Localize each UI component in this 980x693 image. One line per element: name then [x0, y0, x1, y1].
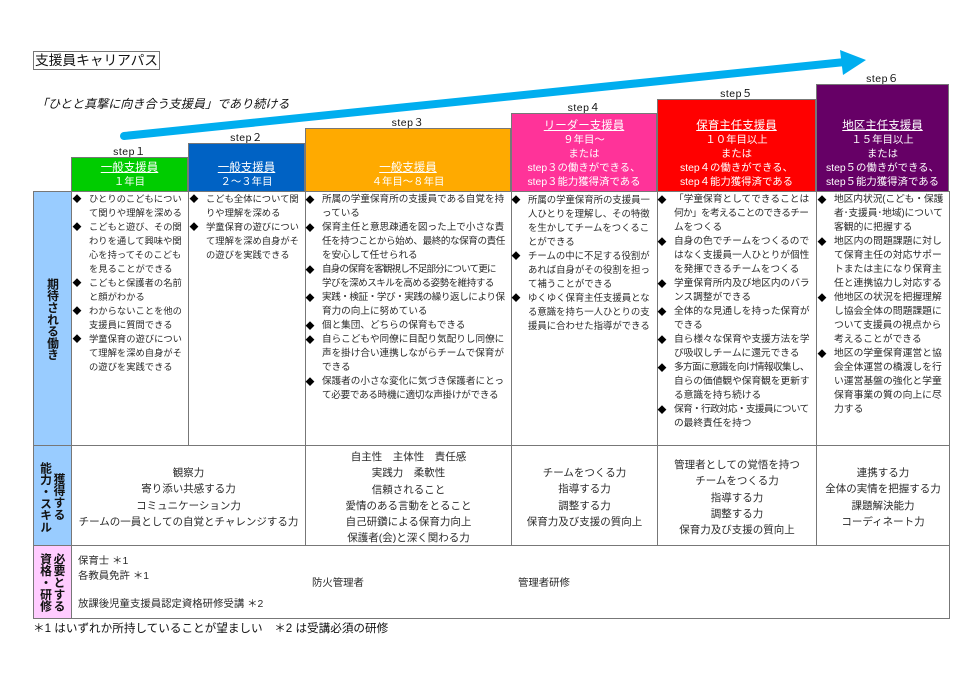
expected work: step 3: 任を持つことから始め、最終的な保育の責任 — [322, 236, 505, 247]
text: ◆ — [511, 195, 520, 205]
text: ◆ — [657, 279, 666, 289]
row label: expected work: 期待される働き — [46, 278, 60, 361]
cell border 5 — [657, 191, 817, 446]
cell border 3 — [305, 191, 512, 446]
expected work: step 2: りや理解を深める — [206, 208, 280, 218]
step 6 header: step５の働きができる、 — [826, 163, 939, 174]
expected work: step 1: を見ることができる — [89, 264, 172, 274]
skills cell: step 5: 指導する力 — [711, 492, 763, 504]
expected work: step 4: チームの中に不足する役割が — [528, 250, 650, 261]
row label: qualifications: 資格・研修 — [38, 552, 52, 612]
expected work: step 6: 地区内状況(こども・保護 — [834, 194, 943, 205]
step 3 header: 一般支援員 — [379, 162, 437, 174]
expected work: step 5: 自身の色でチームをつくるので — [674, 236, 809, 247]
row label: qualifications — [33, 545, 72, 619]
expected work: step 1: て関りや理解を深める — [89, 208, 182, 218]
step 4 header: リーダー支援員 — [544, 120, 624, 132]
step 2 label: step２ — [230, 132, 263, 144]
step 6 header: step５能力獲得済である — [826, 177, 939, 188]
expected work: step 6: 客観的に把握する — [834, 222, 912, 233]
step 2 header — [188, 143, 305, 191]
skills cell: step 4: 調整する力 — [558, 500, 611, 512]
expected work: step 3: て必要である時機に適切な声掛けができる — [322, 390, 498, 401]
step 1 header: １年目 — [114, 177, 145, 188]
skills cell: step 6: 連携する力 — [857, 467, 909, 479]
expected work: step 3 — [305, 194, 505, 401]
qualification: fire manager: 防火管理者 — [312, 578, 364, 589]
row label: qualifications: 必要とする — [52, 552, 66, 612]
expected work: step 6: 地区内の問題課題に対し — [834, 236, 942, 247]
expected work: step 3: 実践・検証・学び・実践の繰り返しにより保 — [322, 292, 505, 303]
expected work: step 2: の遊びを実践できる — [206, 250, 290, 260]
expected work: step 1: の遊びを実践できる — [89, 362, 172, 372]
expected work: step 3: 個と集団、どちらの保育もできる — [322, 320, 465, 331]
step 5 header: １０年目以上 — [705, 135, 768, 146]
expected work: step 6: 考えることができる — [834, 334, 922, 345]
skills cell: step 4 — [511, 445, 658, 546]
expected work: step 3: 所属の学童保育所の支援員である自覚を持 — [322, 194, 504, 205]
step 5 header: step４能力獲得済である — [680, 177, 793, 188]
skills cell: step 3: 実践力 柔軟性 — [372, 467, 445, 479]
expected work: step 5: び吸収しチームに還元できる — [674, 348, 799, 359]
expected work: step 6: ついて支援員の視点から — [834, 320, 941, 331]
expected work: step 4: る意識を持ち一人ひとりの支 — [528, 306, 650, 317]
qualification: teaching license: 各教員免許 ＊1 — [78, 571, 149, 582]
expected work: step 4: 所属の学童保育所の支援員一 — [528, 194, 650, 205]
expected work: step 5: 何か」を考えることのできるチー — [674, 208, 808, 219]
text: ◆ — [72, 306, 82, 316]
expected work: step 4: ゆくゆく保育主任支援員とな — [528, 292, 650, 303]
expected work: step 6: 任と連携協力し対応する — [834, 278, 942, 289]
expected work: step 2: 学童保育の遊びについ — [206, 222, 299, 232]
step 4 header: または — [568, 149, 600, 160]
expected work: step 6: 他地区の状況を把握理解 — [834, 292, 942, 303]
text: ◆ — [72, 194, 82, 204]
skills cell: step 3: 自主性 主体性 責任感 — [351, 451, 466, 463]
skills cell: step 6: 課題解決能力 — [852, 500, 914, 512]
expected work: step 1: わからないことを他の — [89, 306, 182, 316]
expected work: step 5: ンス調整ができる — [674, 292, 751, 303]
skills cell: step 5: チームをつくる力 — [695, 475, 779, 487]
expected work: step 6: 会全体運営の橋渡しを行 — [834, 362, 942, 373]
expected work: step 1: て理解を深め自身がそ — [89, 348, 182, 358]
expected work: step 3: を安心して任せられる — [322, 250, 418, 261]
step 1 header — [71, 157, 188, 191]
step 2 header: 一般支援員 — [218, 162, 275, 174]
expected work: step 4: 人ひとりを理解し、その特徴 — [528, 208, 650, 219]
expected work: step 3: 保護者の小さな変化に気づき保護者にとっ — [322, 376, 504, 387]
step 4 header: step３の働きができる、 — [528, 163, 640, 174]
expected work: step 1: こどもと遊び、その関 — [89, 222, 182, 232]
expected work: step 5: 自らの価値観や保育観を更新す — [674, 376, 810, 387]
skills cell: step 3: 保護者(会)と深く関わる力 — [347, 532, 470, 544]
step 3 header — [305, 128, 511, 191]
text: ◆ — [305, 195, 314, 205]
expected work: step 6: 保育事業の質の向上に尽 — [834, 390, 942, 401]
step 4 header: ９年目～ — [563, 135, 605, 146]
expected work: step 4: て補うことができる — [528, 278, 612, 289]
expected work cells — [71, 191, 189, 446]
expected work: step 5: 自ら様々な保育や支援方法を学 — [674, 334, 810, 345]
skills cell: step 4: 保育力及び支援の質向上 — [527, 516, 642, 528]
text: ◆ — [657, 237, 666, 247]
skills cell: step 6 — [816, 445, 950, 546]
expected work: step 1: と顔がわかる — [89, 292, 145, 302]
text: ◆ — [657, 335, 666, 345]
expected work: step 3: 自らこどもや同僚に目配り気配りし同僚に — [322, 334, 504, 345]
row label: expected work — [33, 191, 72, 446]
step 6 header — [816, 84, 949, 191]
skills cell: step 5 — [657, 445, 817, 546]
expected work: step 2: こども全体について関 — [206, 194, 299, 204]
skills cell: step 3: 信頼されること — [372, 484, 445, 496]
expected work: step 3: 声を掛け合い連携しながらチームで保育が — [322, 348, 504, 359]
expected work: step 5: はなく支援員一人ひとりが個性 — [674, 250, 809, 261]
expected work: step 1 — [72, 194, 182, 372]
skills cell: steps 1-2: チームの一員としての自覚とチャレンジする力 — [79, 516, 298, 528]
expected work: step 1: こどもと保護者の名前 — [89, 278, 182, 288]
tagline: 「ひとと真撃に向き合う支援員」であり続ける — [36, 97, 290, 111]
step 4 header — [511, 113, 657, 191]
step 3 header: ４年目～８年目 — [372, 177, 444, 188]
footnote: ＊1 はいずれか所持していることが望ましい ＊2 は受講必須の研修 — [33, 622, 388, 635]
text: ◆ — [305, 377, 314, 387]
skills cell: step 5: 管理者としての覚悟を持つ — [674, 459, 800, 471]
expected work: step 5: 学童保育所内及び地区内のバラ — [674, 278, 810, 289]
expected work: step 5: ムをつくる — [674, 222, 722, 233]
expected work: step 5: る意識を持ち続ける — [674, 390, 761, 401]
text: ◆ — [305, 321, 314, 331]
skills cell: step 4: チームをつくる力 — [543, 467, 626, 479]
row label: skills: 能力・スキル — [38, 462, 52, 533]
expected work: step 4: とができる — [528, 236, 575, 247]
cell border 4 — [511, 191, 658, 446]
qualification: childcare worker: 保育士 ＊1 — [78, 556, 128, 567]
step 5 header: または — [721, 149, 752, 160]
expected work: step 3: 保育主任と意思疎通を図った上で小さな責 — [322, 222, 504, 233]
text: ◆ — [305, 223, 314, 233]
expected work: step 1: 心を持ってそのこども — [89, 250, 181, 260]
skills cell: step 3 — [305, 445, 512, 546]
skills cell: steps 1-2: コミュニケーション力 — [136, 500, 241, 512]
expected work: step 5 — [657, 194, 810, 429]
skills cell: steps 1-2: 寄り添い共感する力 — [141, 483, 236, 495]
expected work: step 5: の最終責任を持つ — [674, 418, 752, 429]
expected work: step 5: 保育・行政対応・支援員について — [674, 404, 809, 415]
expected work: step 6: 者･支援員･地域)について — [834, 208, 943, 219]
step 3 label: step３ — [392, 117, 424, 129]
skills cell: step 6: コーディネート力 — [841, 516, 925, 528]
skills cell: step 6: 全体の実情を把握する力 — [825, 483, 941, 495]
skills cell: steps 1-2: 観察力 — [173, 467, 204, 479]
skills cell: step 3: 愛情のある言動をとること — [346, 500, 472, 512]
expected work: step 6: し協会全体の問題課題に — [834, 306, 942, 317]
step 6 header: １５年目以上 — [851, 135, 914, 146]
expected work: step 1: わりを通して興味や関 — [89, 236, 182, 246]
expected work: step 5: できる — [674, 320, 703, 331]
text: ◆ — [305, 335, 314, 345]
text: ◆ — [817, 293, 826, 303]
text: ◆ — [72, 278, 82, 288]
expected work: step 4: 援員に合わせた指導ができる — [528, 320, 650, 331]
expected work: step 6 — [817, 194, 943, 415]
expected work: step 3: 学びを深めスキルを高める姿勢を維持する — [322, 278, 494, 289]
step 5 header: step４の働きができる、 — [680, 163, 793, 174]
skills cell: step 5: 調整する力 — [711, 508, 763, 520]
text: ◆ — [305, 293, 314, 303]
step 6 header: 地区主任支援員 — [842, 120, 923, 132]
text: ◆ — [657, 195, 666, 205]
skills cell: step 3: 自己研鑽による保育力向上 — [346, 516, 471, 528]
step 5 header: 保育主任支援員 — [696, 120, 777, 132]
qualification: manager training: 管理者研修 — [518, 578, 570, 589]
expected work: step 1: 支援員に質問できる — [89, 320, 172, 330]
text: ◆ — [657, 363, 666, 373]
text: ◆ — [511, 251, 520, 261]
expected work: step 6: 地区の学童保育運営と協 — [834, 348, 942, 359]
expected work: step 6: い運営基盤の強化と学童 — [834, 376, 942, 387]
expected work: step 2 — [189, 194, 299, 260]
expected work: step 1: ひとりのこどもについ — [89, 194, 182, 204]
step 1 header: 一般支援員 — [101, 162, 158, 174]
step 6 label: step６ — [866, 73, 899, 85]
row label: skills — [33, 445, 72, 546]
step 4 label: step４ — [568, 102, 600, 114]
expected work: step 5: 「学童保育としてできることは — [674, 194, 809, 205]
expected work: step 3: 育力の向上に努めている — [322, 306, 428, 317]
expected work: step 5: を発揮できるチームをつくる — [674, 264, 799, 275]
text: ◆ — [511, 293, 520, 303]
text: ◆ — [305, 265, 314, 275]
expected work: step 4: あれば自身がその役割を担っ — [528, 264, 650, 275]
expected work: step 2: て理解を深め自身がそ — [206, 236, 299, 246]
step 4 header: step３能力獲得済である — [527, 177, 641, 188]
expected work: step 5: 多方面に意識を向け情報収集し、 — [674, 362, 809, 373]
skills cell: step 5: 保育力及び支援の質向上 — [679, 524, 795, 536]
title: 支援員キャリアパス — [35, 53, 158, 68]
expected work: step 3: できる — [322, 362, 351, 373]
text: ◆ — [189, 194, 198, 204]
skills cell: steps 1-2 — [71, 445, 306, 546]
text: ◆ — [72, 222, 82, 232]
expected work: step 4: を生かしてチームをつくるこ — [528, 222, 649, 233]
text: ◆ — [817, 349, 826, 359]
row label: skills: 獲得する — [52, 473, 66, 521]
step 1 label: step１ — [113, 146, 146, 158]
text: ◆ — [189, 222, 198, 232]
expected work: step 6: 力する — [834, 404, 863, 415]
qualifications row — [71, 545, 950, 619]
cell border 2 — [188, 191, 306, 446]
cell border 6 — [816, 191, 950, 446]
qualification: certification training: 放課後児童支援員認定資格研修受講 ＊2 — [78, 599, 263, 610]
text: ◆ — [817, 195, 826, 205]
text: ◆ — [72, 334, 82, 344]
expected work: step 6: トまたは主になり保育主 — [834, 264, 942, 275]
text: ◆ — [817, 237, 826, 247]
expected work: step 3: 自身の保育を客観視し不足部分について更に — [322, 264, 496, 275]
expected work: step 6: て保育主任の対応サポー — [834, 250, 942, 261]
step 2 header: ２～３年目 — [221, 177, 272, 188]
step 6 header: または — [867, 149, 898, 160]
text: ◆ — [657, 307, 666, 317]
expected work: step 1: 学童保育の遊びについ — [89, 334, 182, 344]
expected work: step 4 — [511, 194, 650, 331]
text: ◆ — [657, 405, 666, 415]
expected work: step 3: っている — [322, 208, 360, 219]
skills cell: step 4: 指導する力 — [558, 483, 611, 495]
step 5 header — [657, 99, 816, 191]
expected work: step 5: 全体的な見通しを持った保育が — [674, 306, 810, 317]
step 5 label: step５ — [720, 88, 753, 100]
